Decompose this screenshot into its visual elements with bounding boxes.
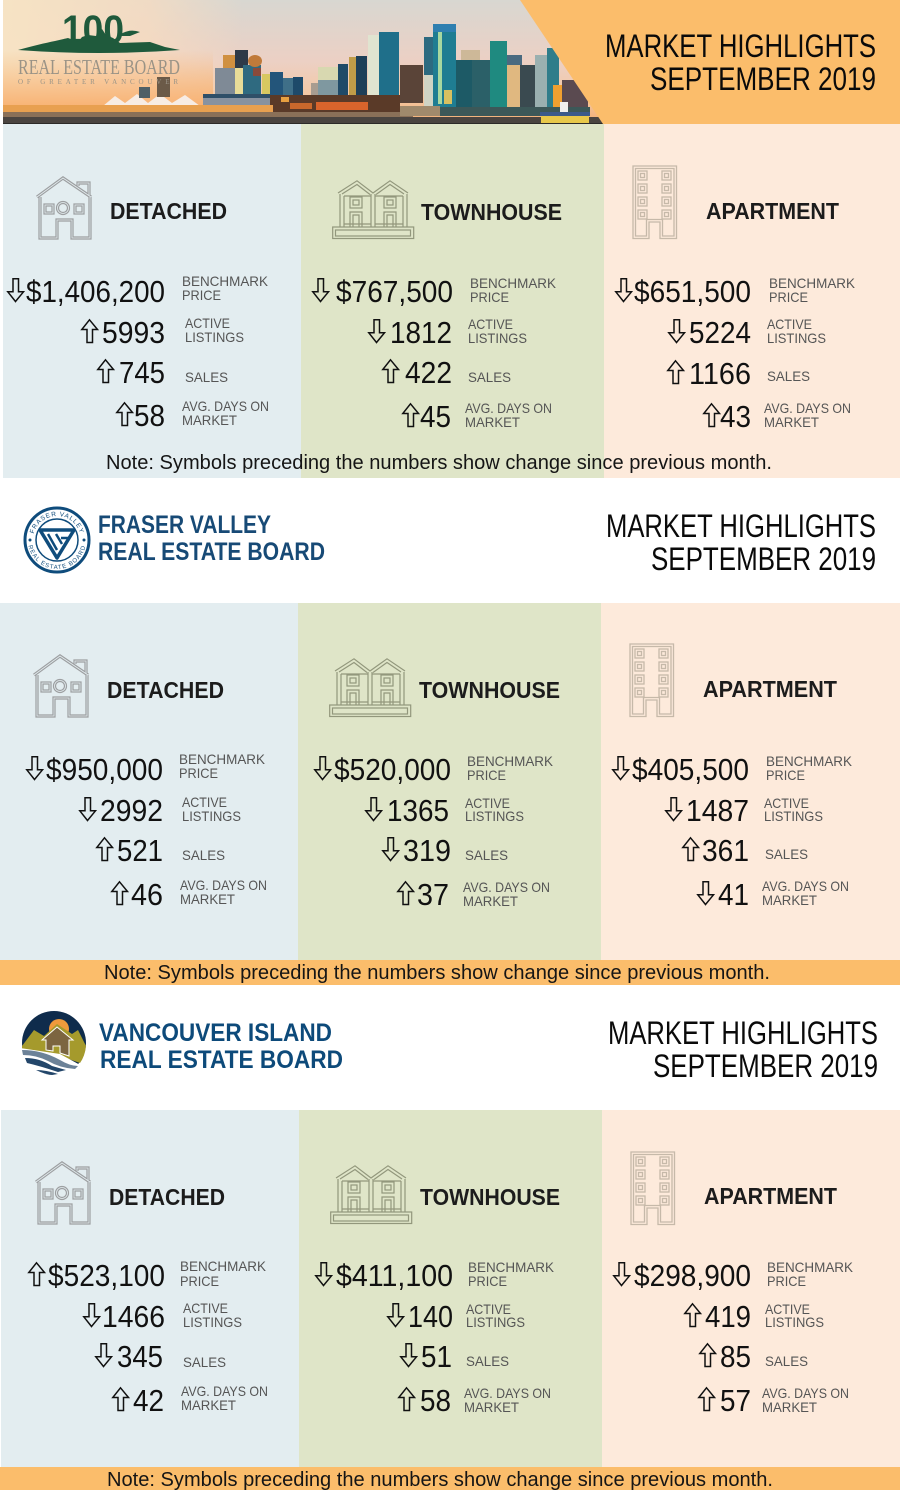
- logo: Vancouver Island Real Estate Board: VANCOUVER ISLAND: [99, 1019, 332, 1047]
- stat: active listings: [685, 1299, 824, 1334]
- stat: sales: [98, 355, 228, 390]
- icon: house: [34, 656, 88, 716]
- stat: active listings: [80, 793, 241, 828]
- icon: house: [36, 1163, 90, 1223]
- heading: detached: DETACHED: [107, 677, 224, 703]
- stat: sales: [383, 833, 508, 868]
- stat: benchmark price: PRICE: [182, 287, 221, 303]
- stat: sales: [383, 355, 511, 390]
- stat: active listings: 1466: [102, 1299, 165, 1334]
- icon: townhouse: [331, 1166, 412, 1224]
- stat: active listings: [84, 1299, 242, 1334]
- stat: benchmark price: PRICE: [180, 1273, 219, 1289]
- stat: active listings: 2992: [100, 793, 163, 828]
- icon: house: [37, 178, 91, 238]
- stat: average days on market: 57: [720, 1383, 751, 1418]
- heading: townhouse: TOWNHOUSE: [419, 677, 560, 703]
- stat: benchmark price: PRICE: [470, 289, 509, 305]
- stat: active listings: 419: [705, 1299, 751, 1334]
- title: Greater Vancouver market highlights: [605, 28, 876, 97]
- stat: sales: SALES: [185, 369, 228, 385]
- stat: active listings: ACTIVE: [466, 1301, 511, 1317]
- stat: sales: [97, 833, 225, 868]
- logo: Real Estate Board of Greater Vancouver: 100: [62, 8, 124, 52]
- logo: Vancouver Island Real Estate Board: [20, 1011, 343, 1076]
- stat: sales: 745: [119, 355, 165, 390]
- stat: active listings: LISTINGS: [765, 1314, 824, 1330]
- header orange corner: [520, 0, 900, 124]
- logo: Real Estate Board of Greater Vancouver: [18, 8, 180, 86]
- stat: average days on market: [704, 399, 851, 434]
- stat: average days on market: AVG. DAYS ON: [463, 879, 550, 895]
- note band: Fraser Valley: Note: Symbols preceding the numbers show change since previous month.: [104, 962, 770, 984]
- stat: average days on market: [698, 877, 849, 912]
- stat: average days on market: MARKET: [464, 1399, 519, 1415]
- stat: sales: 85: [720, 1339, 751, 1374]
- stat: benchmark price: BENCHMARK: [182, 273, 269, 289]
- stat: sales: 51: [421, 1339, 452, 1374]
- stat: sales: 1166: [689, 356, 751, 391]
- stat: benchmark price: $1,406,200: [26, 274, 165, 309]
- stat: benchmark price: [29, 1258, 267, 1293]
- stat: average days on market: 45: [420, 399, 451, 434]
- stat: average days on market: MARKET: [181, 1397, 236, 1413]
- stat: sales: 345: [117, 1339, 163, 1374]
- stat: active listings: LISTINGS: [465, 808, 524, 824]
- stat: benchmark price: $520,000: [334, 752, 451, 787]
- stat: benchmark price: PRICE: [769, 289, 808, 305]
- stat: benchmark price: PRICE: [767, 1273, 806, 1289]
- stat: benchmark price: BENCHMARK: [470, 275, 557, 291]
- stat: benchmark price: $411,100: [336, 1258, 453, 1293]
- logo: Fraser Valley Real Estate Board: FRASER VALLEY: [30, 512, 84, 534]
- stat: active listings: 1487: [686, 793, 749, 828]
- stat: active listings: [666, 793, 823, 828]
- stat: average days on market: [399, 1383, 551, 1418]
- stat: benchmark price: [613, 752, 853, 787]
- icon: apartment: [630, 644, 674, 716]
- stat: average days on market: AVG. DAYS ON: [180, 877, 267, 893]
- stat: benchmark price: [8, 273, 269, 309]
- stat: sales: [96, 1339, 226, 1374]
- note band: Fraser Valley: [0, 960, 900, 985]
- stat: benchmark price: $950,000: [46, 752, 163, 787]
- stat: sales: 361: [702, 833, 749, 868]
- stat: average days on market: MARKET: [180, 891, 235, 907]
- stat: average days on market: [117, 398, 269, 433]
- stat: average days on market: [699, 1383, 849, 1418]
- stat: average days on market: 37: [417, 877, 449, 912]
- stat: average days on market: 58: [420, 1383, 451, 1418]
- stat: average days on market: [403, 399, 552, 434]
- stat: sales: [401, 1339, 509, 1374]
- stat: benchmark price: $523,100: [48, 1258, 165, 1293]
- stat: benchmark price: PRICE: [467, 767, 506, 783]
- stat: benchmark price: $298,900: [634, 1258, 751, 1293]
- logo: Fraser Valley Real Estate Board: REAL ESTATE BOARD: [98, 538, 325, 566]
- heading: apartment: APARTMENT: [704, 1183, 837, 1209]
- stat: average days on market: 46: [131, 877, 163, 912]
- stat: sales: [668, 356, 810, 391]
- stat: active listings: LISTINGS: [764, 808, 823, 824]
- stat: average days on market: AVG. DAYS ON: [464, 1385, 551, 1401]
- icon: townhouse: [330, 659, 411, 716]
- panel: Fraser Valley apartment: [601, 603, 900, 960]
- stat: active listings: [366, 793, 524, 828]
- stat: benchmark price: BENCHMARK: [769, 275, 856, 291]
- stat: benchmark price: [616, 274, 856, 309]
- heading: townhouse: TOWNHOUSE: [420, 1184, 560, 1210]
- stat: sales: SALES: [183, 1354, 226, 1370]
- stat: benchmark price: $405,500: [632, 752, 749, 787]
- stat: sales: SALES: [468, 369, 511, 385]
- stat: average days on market: AVG. DAYS ON: [762, 1385, 849, 1401]
- stat: active listings: ACTIVE: [468, 316, 513, 332]
- stat: active listings: LISTINGS: [767, 330, 826, 346]
- stat: active listings: ACTIVE: [185, 315, 230, 331]
- stat: active listings: ACTIVE: [182, 794, 227, 810]
- panel: Vancouver Island townhouse: [299, 1110, 602, 1467]
- stat: benchmark price: [316, 1258, 555, 1293]
- icon: apartment: [631, 1152, 674, 1224]
- stat: benchmark price: BENCHMARK: [180, 1258, 267, 1274]
- stat: benchmark price: BENCHMARK: [467, 753, 554, 769]
- stat: benchmark price: PRICE: [179, 765, 218, 781]
- stat: sales: SALES: [182, 847, 225, 863]
- stat: benchmark price: BENCHMARK: [767, 1259, 854, 1275]
- logo: Real Estate Board of Greater Vancouver: REAL ESTATE BOARD: [18, 55, 180, 79]
- header banner: Greater Vancouver skyline: [3, 0, 603, 124]
- stat: sales: SALES: [465, 847, 508, 863]
- stat: average days on market: 42: [133, 1383, 164, 1418]
- stat: average days on market: [398, 877, 550, 912]
- stat: sales: 521: [117, 833, 163, 868]
- stat: benchmark price: BENCHMARK: [766, 753, 853, 769]
- panel: Greater Vancouver detached: [3, 124, 301, 478]
- stat: sales: 319: [403, 833, 451, 868]
- panel: Fraser Valley townhouse: [298, 603, 601, 960]
- stat: average days on market: [112, 877, 267, 912]
- logo: Fraser Valley Real Estate Board: FRASER VALLEY: [98, 511, 271, 539]
- note band: Vancouver Island: [0, 1467, 900, 1490]
- logo: Vancouver Island Real Estate Board: REAL ESTATE BOARD: [100, 1046, 343, 1074]
- heading: detached: DETACHED: [110, 198, 227, 224]
- stat: average days on market: MARKET: [764, 414, 819, 430]
- stat: active listings: ACTIVE: [765, 1301, 810, 1317]
- heading: apartment: APARTMENT: [706, 198, 839, 224]
- stat: active listings: LISTINGS: [466, 1314, 525, 1330]
- logo: Fraser Valley Real Estate Board: REAL ESTATE BOARD: [28, 545, 85, 569]
- stat: active listings: ACTIVE: [764, 795, 809, 811]
- stat: active listings: ACTIVE: [183, 1300, 228, 1316]
- note: Greater Vancouver: Note: Symbols preceding the numbers show change since previous month.: [106, 452, 772, 474]
- stat: sales: SALES: [466, 1353, 509, 1369]
- stat: average days on market: MARKET: [762, 1399, 817, 1415]
- stat: average days on market: MARKET: [465, 414, 520, 430]
- stat: benchmark price: BENCHMARK: [468, 1259, 555, 1275]
- stat: average days on market: AVG. DAYS ON: [465, 400, 552, 416]
- icon: townhouse: [333, 181, 414, 238]
- heading: townhouse: TOWNHOUSE: [421, 199, 562, 225]
- panel: Fraser Valley detached: [0, 603, 298, 960]
- stat: benchmark price: [614, 1258, 854, 1293]
- stat: sales: 422: [405, 355, 452, 390]
- stat: average days on market: 41: [718, 877, 749, 912]
- stat: sales: [700, 1339, 808, 1374]
- stat: benchmark price: PRICE: [766, 767, 805, 783]
- icon: apartment: [633, 166, 676, 238]
- stat: active listings: ACTIVE: [465, 795, 510, 811]
- stat: sales: [683, 833, 808, 868]
- stat: benchmark price: [27, 751, 266, 787]
- stat: active listings: [388, 1299, 525, 1334]
- title: Fraser Valley market highlights: [606, 508, 876, 577]
- stat: benchmark price: PRICE: [468, 1273, 507, 1289]
- stat: average days on market: 43: [720, 399, 751, 434]
- title: Vancouver Island market highlights: [608, 1015, 878, 1084]
- stat: average days on market: MARKET: [182, 412, 237, 428]
- stat: average days on market: 58: [134, 398, 165, 433]
- stat: active listings: [82, 315, 244, 350]
- heading: apartment: APARTMENT: [703, 676, 837, 702]
- stat: benchmark price: $651,500: [634, 274, 751, 309]
- stat: average days on market: AVG. DAYS ON: [181, 1383, 268, 1399]
- stat: active listings: [669, 315, 826, 350]
- stat: active listings: 5993: [102, 315, 165, 350]
- stat: benchmark price: BENCHMARK: [179, 751, 266, 767]
- stat: sales: SALES: [765, 1353, 808, 1369]
- stat: average days on market: AVG. DAYS ON: [182, 398, 269, 414]
- logo: Fraser Valley Real Estate Board: [24, 506, 325, 574]
- stat: active listings: LISTINGS: [182, 808, 241, 824]
- stat: average days on market: AVG. DAYS ON: [762, 878, 849, 894]
- stat: active listings: ACTIVE: [767, 316, 812, 332]
- stat: benchmark price: [313, 274, 557, 309]
- panel: Vancouver Island apartment: [602, 1110, 900, 1467]
- panel: Greater Vancouver townhouse: [301, 124, 604, 478]
- stat: active listings: 140: [408, 1299, 453, 1334]
- stat: average days on market: MARKET: [463, 893, 518, 909]
- stat: active listings: LISTINGS: [185, 329, 244, 345]
- stat: sales: SALES: [765, 846, 808, 862]
- stat: active listings: [369, 315, 527, 350]
- heading: detached: DETACHED: [109, 1184, 225, 1210]
- stat: active listings: LISTINGS: [183, 1314, 242, 1330]
- stat: active listings: 1812: [390, 315, 452, 350]
- stat: benchmark price: [315, 752, 554, 787]
- stat: active listings: 1365: [387, 793, 449, 828]
- logo: Real Estate Board of Greater Vancouver: OF GREATER VANCOUVER: [18, 78, 178, 86]
- stat: active listings: LISTINGS: [468, 330, 527, 346]
- stat: average days on market: [113, 1383, 268, 1418]
- stat: average days on market: AVG. DAYS ON: [764, 400, 851, 416]
- stat: benchmark price: $767,500: [336, 274, 453, 309]
- stat: active listings: 5224: [689, 315, 751, 350]
- stat: average days on market: MARKET: [762, 892, 817, 908]
- panel: Greater Vancouver apartment: [604, 124, 900, 478]
- stat: sales: SALES: [767, 368, 810, 384]
- panel: Vancouver Island detached: [1, 1110, 299, 1467]
